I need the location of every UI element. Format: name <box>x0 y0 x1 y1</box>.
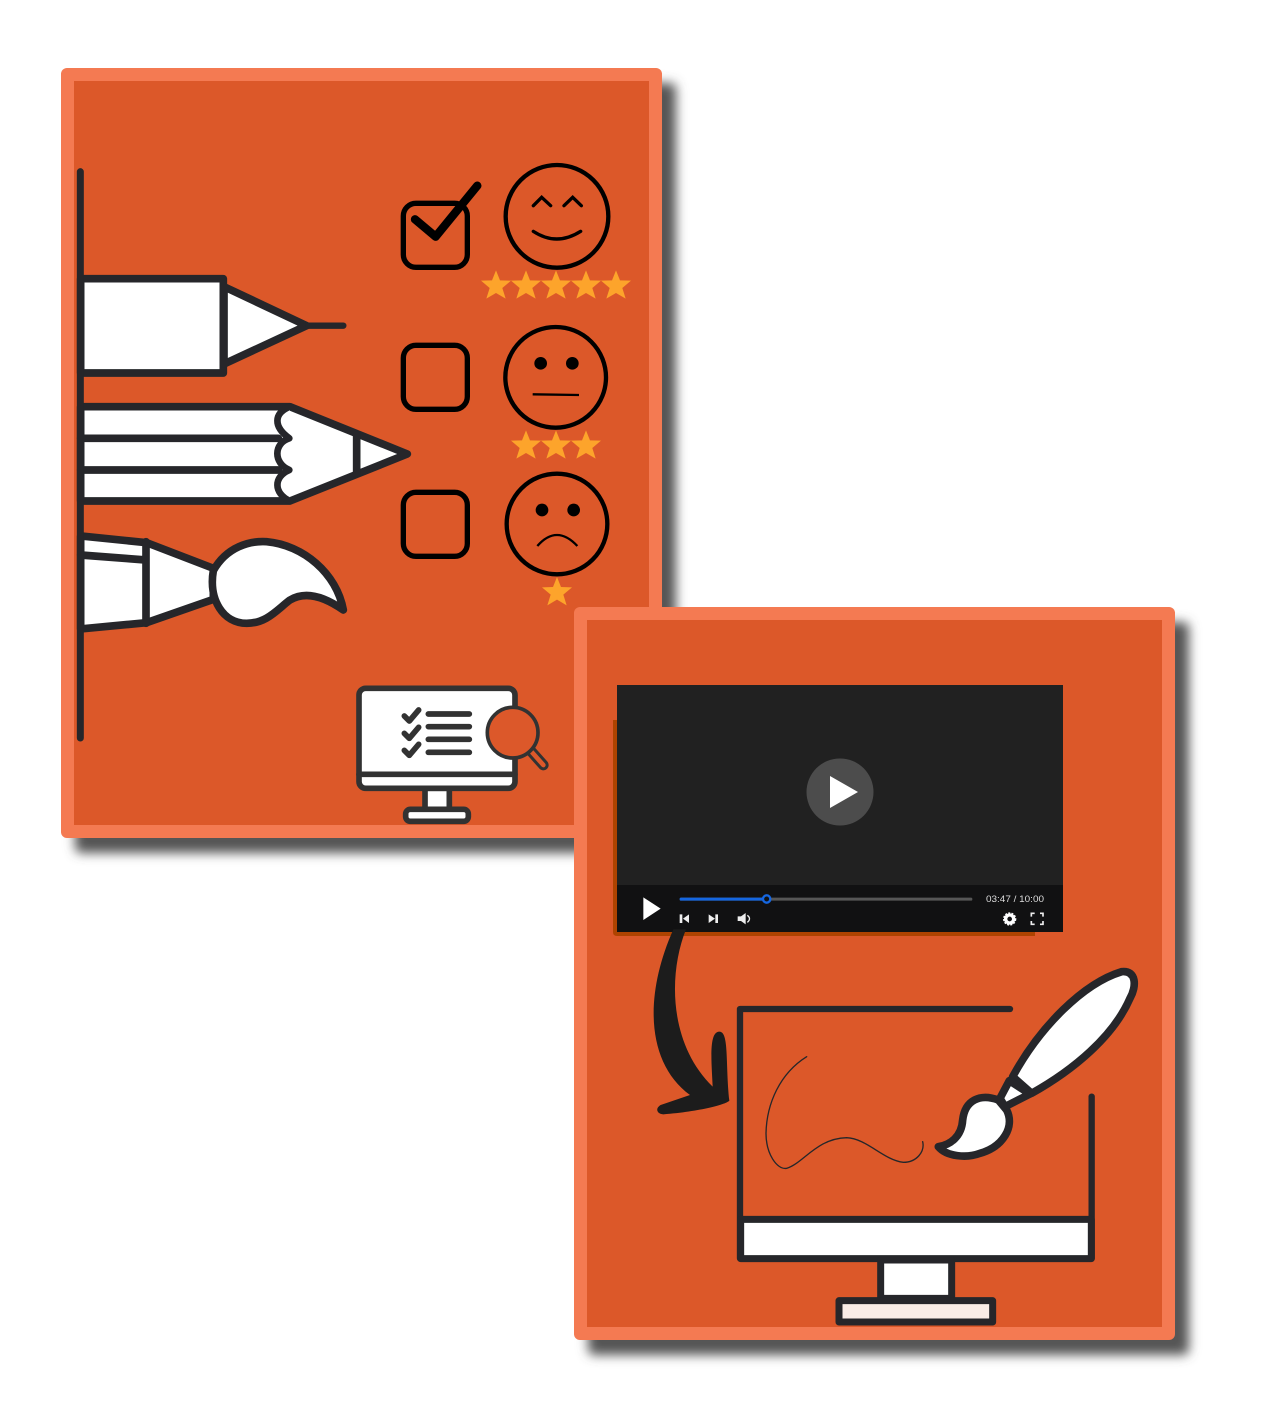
marker <box>81 279 343 373</box>
panel: video to drawing <box>574 607 1189 1355</box>
vertical baseline <box>70 172 91 738</box>
three stars <box>511 430 601 459</box>
play button <box>806 758 874 826</box>
monitor bar and stand <box>741 1219 1091 1322</box>
panel: rating and tools <box>61 68 676 853</box>
checkbox: empty bottom <box>403 492 467 556</box>
face: happy <box>506 165 608 268</box>
icon: monitor checklist with magnifier <box>359 688 543 821</box>
paint brush <box>938 972 1134 1156</box>
face: sad <box>507 474 607 574</box>
monitor frame <box>740 1009 1092 1258</box>
arrow from video to monitor <box>654 929 729 1114</box>
time label: 03:47 / 10:00 <box>986 894 1044 905</box>
player controls <box>643 895 1043 925</box>
paint brush <box>81 536 343 629</box>
face: neutral <box>505 327 606 428</box>
sketched line <box>766 1057 923 1168</box>
pencil <box>81 407 407 501</box>
five stars <box>481 270 631 299</box>
one star <box>542 577 572 605</box>
checkbox: checked <box>403 186 477 267</box>
rating checklist with smiley faces and stars <box>403 165 631 605</box>
monitor with brush sketch <box>740 972 1134 1322</box>
checkbox: empty middle <box>403 345 467 409</box>
video player <box>613 685 1063 936</box>
drawing tools: marker, pencil and brush <box>80 172 407 738</box>
